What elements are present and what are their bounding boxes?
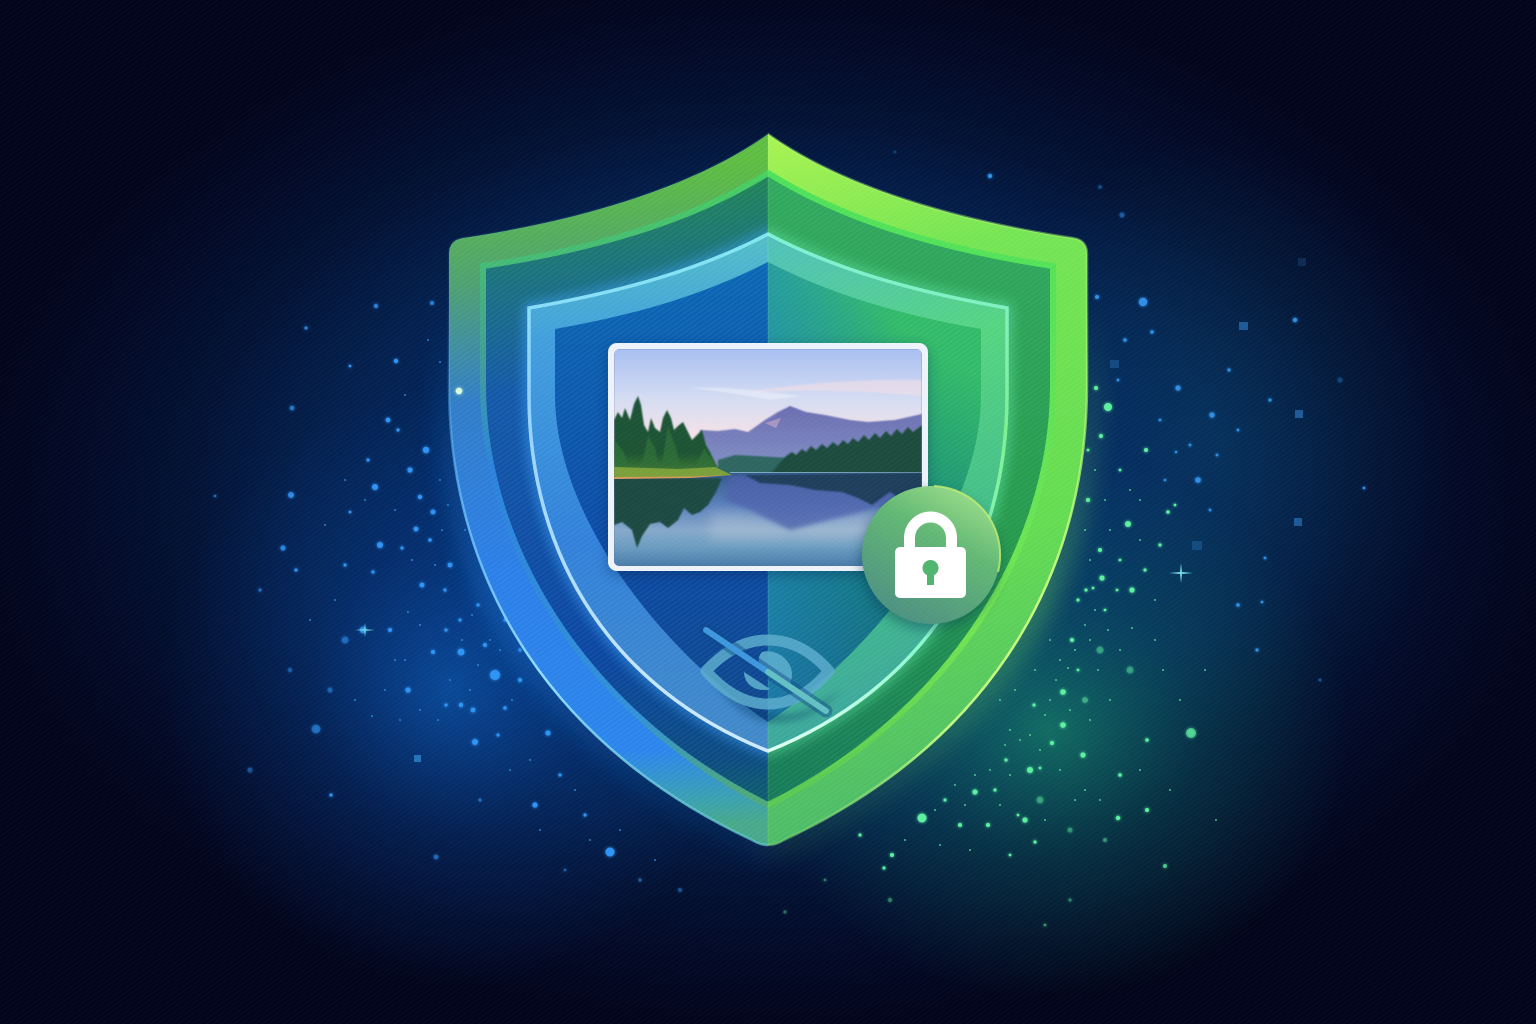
icon: padlock xyxy=(895,517,966,598)
reflection of the right tree line xyxy=(745,473,922,505)
shield outer glow xyxy=(432,348,1106,859)
sky xyxy=(614,349,922,440)
right tree line xyxy=(770,425,922,474)
eye pupil xyxy=(744,651,792,690)
mountain reflection xyxy=(726,476,895,532)
particles: upper right blue field xyxy=(894,151,1365,681)
particles: tiny green dust xyxy=(904,469,1217,851)
lock badge xyxy=(860,486,1000,630)
shield centre seam xyxy=(768,134,769,846)
left shore xyxy=(614,467,732,478)
shield xyxy=(449,134,1087,846)
eye slash gap xyxy=(706,630,826,711)
middle dark band xyxy=(483,173,1053,805)
particles: tiny blue dust xyxy=(309,339,656,861)
sky reflection xyxy=(710,510,900,540)
photo vignette xyxy=(614,349,922,566)
card shadow xyxy=(608,346,928,576)
shield surface texture xyxy=(449,134,1087,845)
lake xyxy=(614,473,922,568)
badge shadow xyxy=(860,490,1000,630)
card frame xyxy=(608,343,928,571)
tree trunks and lit sides xyxy=(614,426,714,466)
particle: four-point star sparkle xyxy=(355,563,1193,637)
particle: blue square xyxy=(414,755,421,762)
badge circle xyxy=(862,486,1000,624)
slash right xyxy=(768,672,826,711)
shoreline light xyxy=(730,472,922,473)
particles: blue left field xyxy=(214,301,682,892)
clouds xyxy=(690,380,922,400)
eye soft shadow xyxy=(712,680,840,723)
outer band xyxy=(449,134,1087,845)
glowing inner line xyxy=(529,234,1007,751)
particles: green lower right field xyxy=(783,386,1196,926)
lake landscape scene xyxy=(614,349,922,568)
inner core xyxy=(555,262,981,722)
far mountains xyxy=(700,406,922,476)
hazy distant trees xyxy=(718,455,790,474)
left forest xyxy=(614,396,720,472)
eye outline xyxy=(706,640,829,704)
sunlit mountain face xyxy=(765,418,781,428)
slash left xyxy=(706,630,768,672)
icon: crossed-out eye xyxy=(706,630,840,723)
particles: square blue markers, right xyxy=(1110,258,1306,550)
photo card with white frame xyxy=(608,343,928,576)
reflection of the left forest xyxy=(614,478,722,548)
inner glowing band xyxy=(529,234,1007,751)
glint on the shield edge xyxy=(456,388,462,394)
